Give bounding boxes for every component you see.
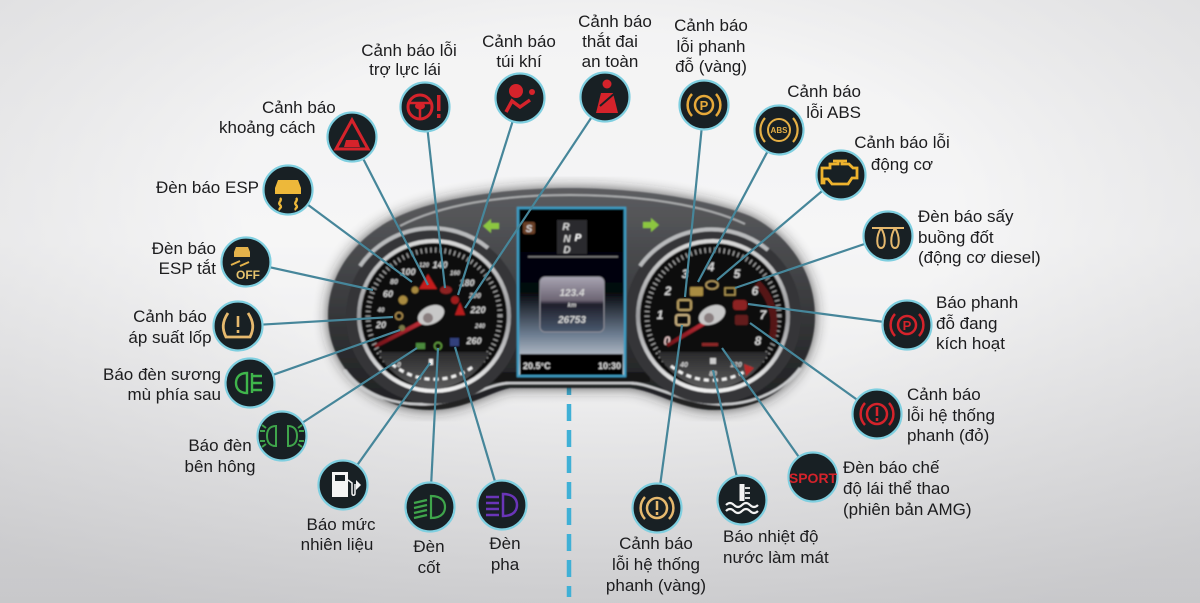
label: parking brake engaged: Báo phanh <box>936 293 1018 312</box>
icon: ABS warning <box>754 106 804 154</box>
icon: rear fog light <box>226 358 274 408</box>
center display: 123.4 <box>559 288 585 299</box>
icon: parking brake engaged <box>882 300 932 350</box>
label: coolant temperature: nước làm mát <box>723 548 829 567</box>
right gauge: 3 <box>682 267 689 281</box>
icon: engine warning <box>816 150 866 200</box>
icon: tire pressure <box>214 302 262 350</box>
label: ABS warning: lỗi ABS <box>806 103 861 122</box>
left gauge: 0 <box>397 362 401 369</box>
label: high beam: Đèn <box>489 534 521 553</box>
icon: brake system yellow <box>632 484 682 532</box>
icon: airbag warning <box>496 74 544 122</box>
icon: coolant temperature <box>718 476 766 524</box>
right gauge: 4 <box>707 260 715 274</box>
label: engine warning: động cơ <box>871 155 933 174</box>
label: rear fog light: Báo đèn sương <box>103 365 221 384</box>
icon: glow plug <box>864 212 912 260</box>
label: low beam: cốt <box>418 558 441 577</box>
label: parking brake engaged: kích hoạt <box>936 334 1005 353</box>
label: sport mode: Đèn báo chế <box>843 458 940 477</box>
left gauge: 60 <box>383 289 393 299</box>
left gauge: 200 <box>468 293 481 300</box>
label: sport mode: (phiên bản AMG) <box>843 500 972 519</box>
left gauge: 260 <box>465 336 482 346</box>
label: engine warning: Cảnh báo lỗi <box>854 133 950 152</box>
label: yellow brake system: phanh (vàng) <box>606 576 706 595</box>
label: airbag warning: Cảnh báo <box>482 32 556 51</box>
center display: N <box>563 234 571 245</box>
label: ABS warning: Cảnh báo <box>787 82 861 101</box>
center display: D <box>563 245 571 256</box>
label: low beam: Đèn <box>413 537 445 556</box>
icon: ESP off: OFF <box>236 268 260 282</box>
label: fuel level: nhiên liệu <box>301 535 373 554</box>
icon: power steering warning <box>400 82 450 132</box>
icon: sport mode <box>788 452 838 502</box>
label: airbag warning: túi khí <box>496 52 542 71</box>
label: tire pressure: Cảnh báo <box>133 307 207 326</box>
label: high beam: pha <box>491 555 520 574</box>
center display: 20.5°C <box>523 361 551 371</box>
label: sport mode: độ lái thể thao <box>843 479 950 498</box>
label: yellow parking brake: lỗi phanh <box>676 37 746 56</box>
left gauge <box>346 228 522 404</box>
label: glow plug: (động cơ diesel) <box>918 248 1041 267</box>
label: power steering warning: trợ lực lái <box>369 60 441 79</box>
right gauge: 80 <box>709 371 717 378</box>
icon: parking brake yellow: P <box>700 98 709 113</box>
label: rear fog light: mù phía sau <box>127 385 221 404</box>
label: red brake system: lỗi hệ thống <box>907 406 995 425</box>
right gauge: 40 <box>679 362 688 369</box>
icon: brake system red <box>852 390 902 438</box>
left gauge: 20 <box>375 320 386 330</box>
leader lines <box>238 97 907 508</box>
left gauge: 140 <box>432 260 448 270</box>
right gauge: 6 <box>752 284 759 298</box>
icon: ESP off <box>222 238 270 286</box>
right gauge: 5 <box>734 267 741 281</box>
icon: ESP <box>264 166 312 214</box>
right gauge: 120 <box>730 362 742 369</box>
label: side lights: bên hông <box>185 457 255 476</box>
left gauge: 80 <box>390 279 398 286</box>
label: ESP: Đèn báo ESP <box>156 178 259 197</box>
icon: green right arrow <box>643 218 659 232</box>
label: distance warning: Cảnh báo <box>262 98 336 117</box>
left gauge: 120 <box>419 263 430 269</box>
icon: parking brake engaged: P <box>903 318 912 333</box>
label: glow plug: Đèn báo sấy <box>918 207 1014 226</box>
left gauge: 100 <box>400 267 416 277</box>
label: ESP off: Đèn báo <box>152 239 216 258</box>
icon: low beam <box>406 482 454 532</box>
icon: green left arrow <box>483 219 499 233</box>
center display <box>518 208 625 376</box>
label: seatbelt warning: an toàn <box>582 52 638 71</box>
label: seatbelt warning: Cảnh báo <box>578 12 652 31</box>
left gauge: 220 <box>469 305 486 315</box>
right gauge: 2 <box>664 284 672 298</box>
label: side lights: Báo đèn <box>188 436 252 455</box>
label: coolant temperature: Báo nhiệt độ <box>723 527 818 546</box>
center display: 10:30 <box>598 361 621 371</box>
label: distance warning: khoảng cách <box>219 118 315 137</box>
instrument cluster <box>328 188 815 410</box>
center dashed line <box>567 378 571 597</box>
icon: seatbelt warning <box>580 72 630 122</box>
center display: P <box>575 233 582 244</box>
label: yellow brake system: Cảnh báo <box>619 534 693 553</box>
icon: side lights <box>258 412 306 460</box>
right gauge: 0 <box>664 334 671 348</box>
center display: R <box>562 222 570 233</box>
right gauge <box>625 228 801 404</box>
center display: km <box>568 303 577 309</box>
label: seatbelt warning: thắt đai <box>582 32 638 51</box>
label: glow plug: buồng đốt <box>918 228 994 247</box>
label: fuel level: Báo mức <box>306 515 376 534</box>
icon: high beam <box>478 480 526 530</box>
label: ESP off: ESP tắt <box>159 259 216 278</box>
label: red brake system: phanh (đỏ) <box>907 426 989 445</box>
right gauge: 1 <box>657 308 664 322</box>
icon: fuel level <box>318 460 368 510</box>
icon: ABS warning: ABS <box>771 126 788 135</box>
icon: parking brake yellow <box>680 80 728 130</box>
icon: sport mode: SPORT <box>789 470 838 486</box>
icon: distance warning <box>328 112 376 162</box>
right gauge: 8 <box>755 334 762 348</box>
left gauge: 160 <box>450 271 461 277</box>
center display: S <box>526 224 533 235</box>
center display: 26753 <box>557 315 586 326</box>
left gauge: 40 <box>377 308 385 314</box>
label: yellow parking brake: đỗ (vàng) <box>675 57 747 76</box>
label: power steering warning: Cảnh báo lỗi <box>361 41 457 60</box>
label: yellow brake system: lỗi hệ thống <box>612 555 700 574</box>
label: parking brake engaged: đỗ đang <box>936 314 997 333</box>
right gauge: 7 <box>760 308 768 322</box>
label: red brake system: Cảnh báo <box>907 385 981 404</box>
left gauge: 240 <box>474 324 486 330</box>
left gauge: 180 <box>459 278 475 288</box>
label: tire pressure: áp suất lốp <box>128 328 212 347</box>
label: yellow parking brake: Cảnh báo <box>674 16 748 35</box>
